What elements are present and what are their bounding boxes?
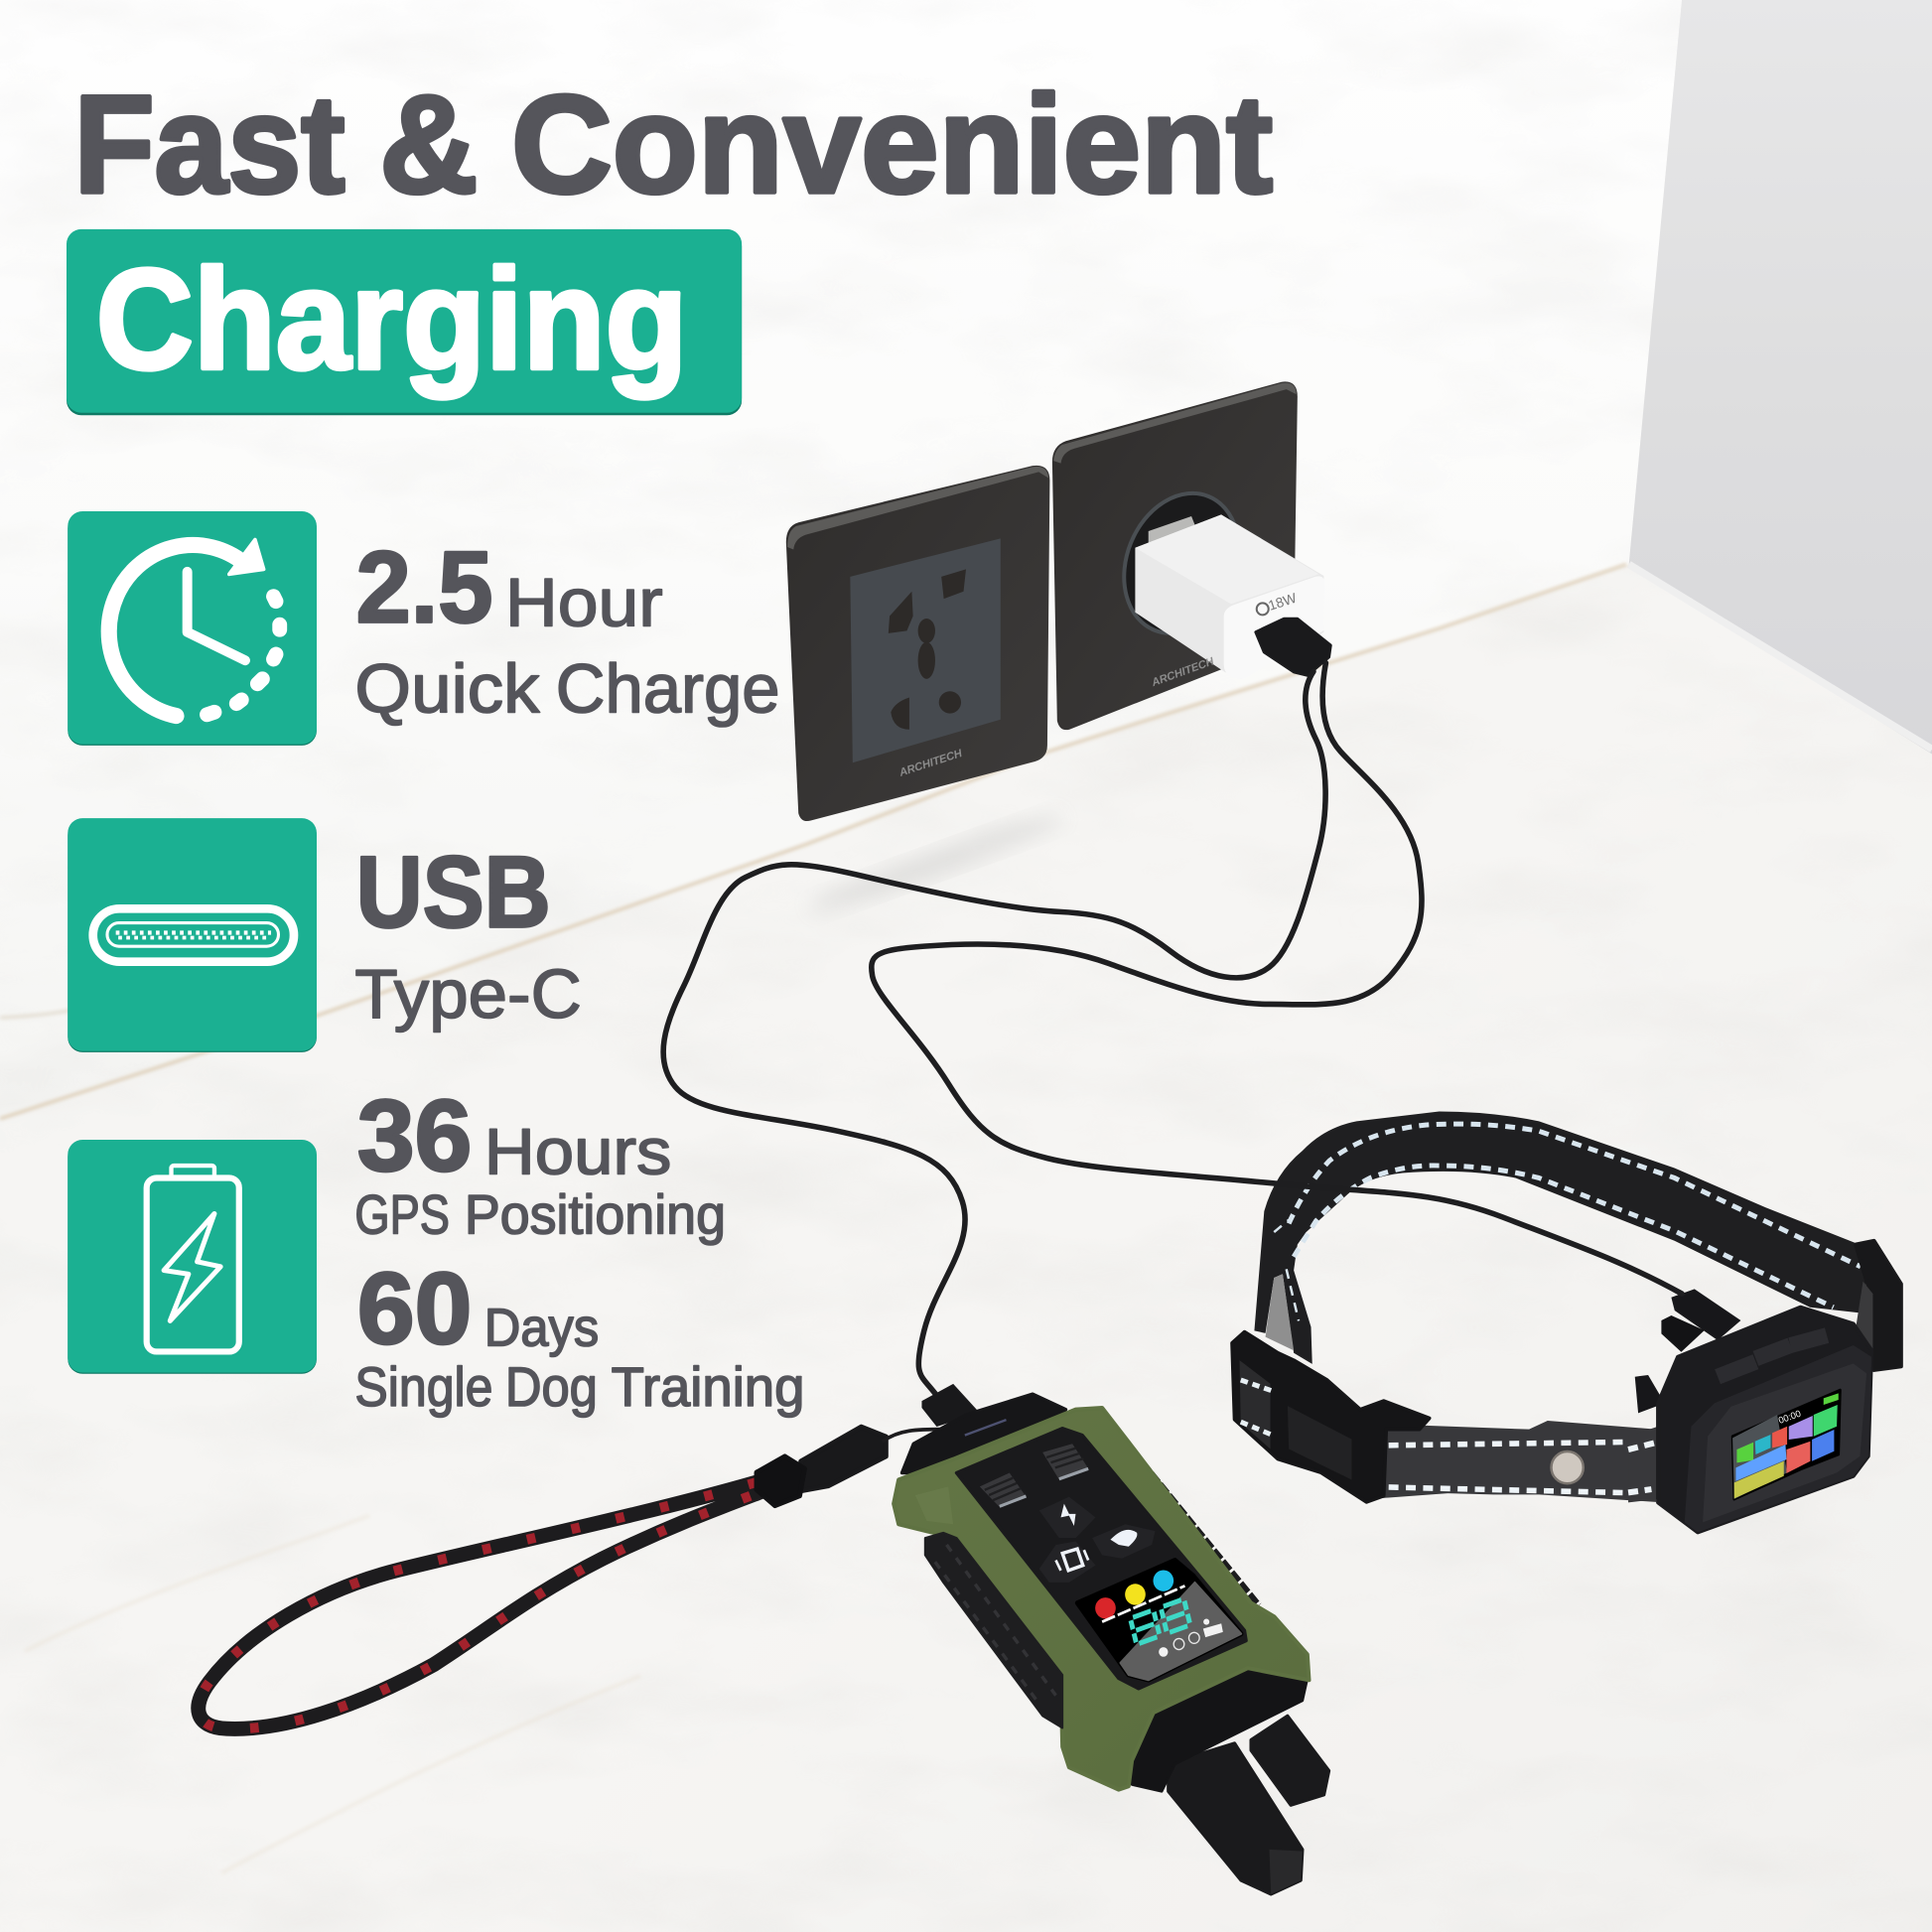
text block: USB Type-C [354, 835, 582, 1033]
wattage text: 18W [1266, 590, 1299, 614]
text block: 60 Days Single Dog Training: Days [484, 1299, 599, 1357]
socket panel [850, 538, 1001, 762]
text block: 60 Days Single Dog Training: Dog [505, 1355, 598, 1418]
strap stitching [1274, 1124, 1861, 1320]
remote top cap [901, 1394, 1065, 1473]
panel: quick charge icon [68, 511, 317, 746]
text block: 36 Hours GPS Positioning [354, 1079, 726, 1245]
cable to remote [663, 671, 1325, 1399]
text block: 2.5 Hour Quick Charge: Hour [505, 565, 663, 640]
title: Fast [73, 67, 345, 222]
lower strap [1380, 1421, 1656, 1502]
text block: 2.5 Hour Quick Charge: Charge [556, 649, 780, 727]
panel: USB Type-C icon [68, 818, 317, 1052]
text block: USB Type-C: Type-C [354, 955, 582, 1033]
brand text: ARCHITECH [897, 748, 965, 779]
wall socket left [786, 466, 1049, 821]
left grip [925, 1533, 1062, 1727]
icon: battery with bolt [147, 1166, 239, 1351]
right strap loop [1856, 1241, 1901, 1370]
USB-C connector [921, 1384, 980, 1427]
text block: 2.5 Hour Quick Charge: 2.5 [356, 531, 492, 644]
text block: 2.5 Hour Quick Charge [354, 531, 780, 727]
brand text: ARCHITECH [1150, 655, 1216, 689]
receiver body [1658, 1308, 1871, 1532]
receiver screen [1732, 1390, 1840, 1499]
buckle [1232, 1332, 1430, 1502]
dog collar [1232, 1111, 1901, 1532]
cable to collar [872, 663, 1682, 1294]
LCD display [1077, 1560, 1241, 1680]
text block: 36 Hours GPS Positioning: GPS [354, 1182, 450, 1245]
remote end cap [1129, 1668, 1308, 1791]
control panel [956, 1429, 1246, 1689]
icon: USB-C port [93, 908, 294, 962]
title: Convenient [511, 67, 1273, 222]
text block: 60 Days Single Dog Training: 60 [357, 1252, 472, 1365]
text block: 2.5 Hour Quick Charge: Quick [354, 649, 540, 727]
remote transmitter [894, 1384, 1328, 1894]
screen clock text: 00:00 [1777, 1409, 1802, 1426]
collar charging plug and receiver [1628, 1289, 1871, 1532]
title [73, 67, 1273, 222]
icon: clock with arrow [109, 540, 280, 716]
lanyard clip [801, 1427, 886, 1491]
text block: 36 Hours GPS Positioning: Positioning [465, 1182, 726, 1245]
text block: 60 Days Single Dog Training: Training [612, 1355, 804, 1418]
rocker buttons [980, 1444, 1089, 1507]
charging cables [663, 663, 1682, 1399]
panel: battery icon [68, 1140, 317, 1374]
snap rivet [1552, 1451, 1584, 1483]
green housing [894, 1408, 1309, 1790]
function buttons [1039, 1497, 1155, 1583]
title: & [379, 67, 479, 222]
text block: 60 Days Single Dog Training: Single [354, 1355, 492, 1418]
charger and plug [1104, 476, 1330, 679]
heading badge: Charging: Charging [96, 239, 688, 399]
7-segment digits [1130, 1599, 1190, 1644]
right grip [1132, 1452, 1258, 1606]
text block: 36 Hours GPS Positioning: Hours [484, 1115, 671, 1188]
text block: USB Type-C: USB [356, 835, 551, 948]
lanyard [199, 1427, 942, 1728]
text block: 36 Hours GPS Positioning: 36 [357, 1079, 472, 1192]
text block: 60 Days Single Dog Training [354, 1252, 804, 1418]
collar strap [1254, 1111, 1865, 1364]
wall socket right with charger [1052, 381, 1330, 730]
antennas [1169, 1716, 1328, 1894]
